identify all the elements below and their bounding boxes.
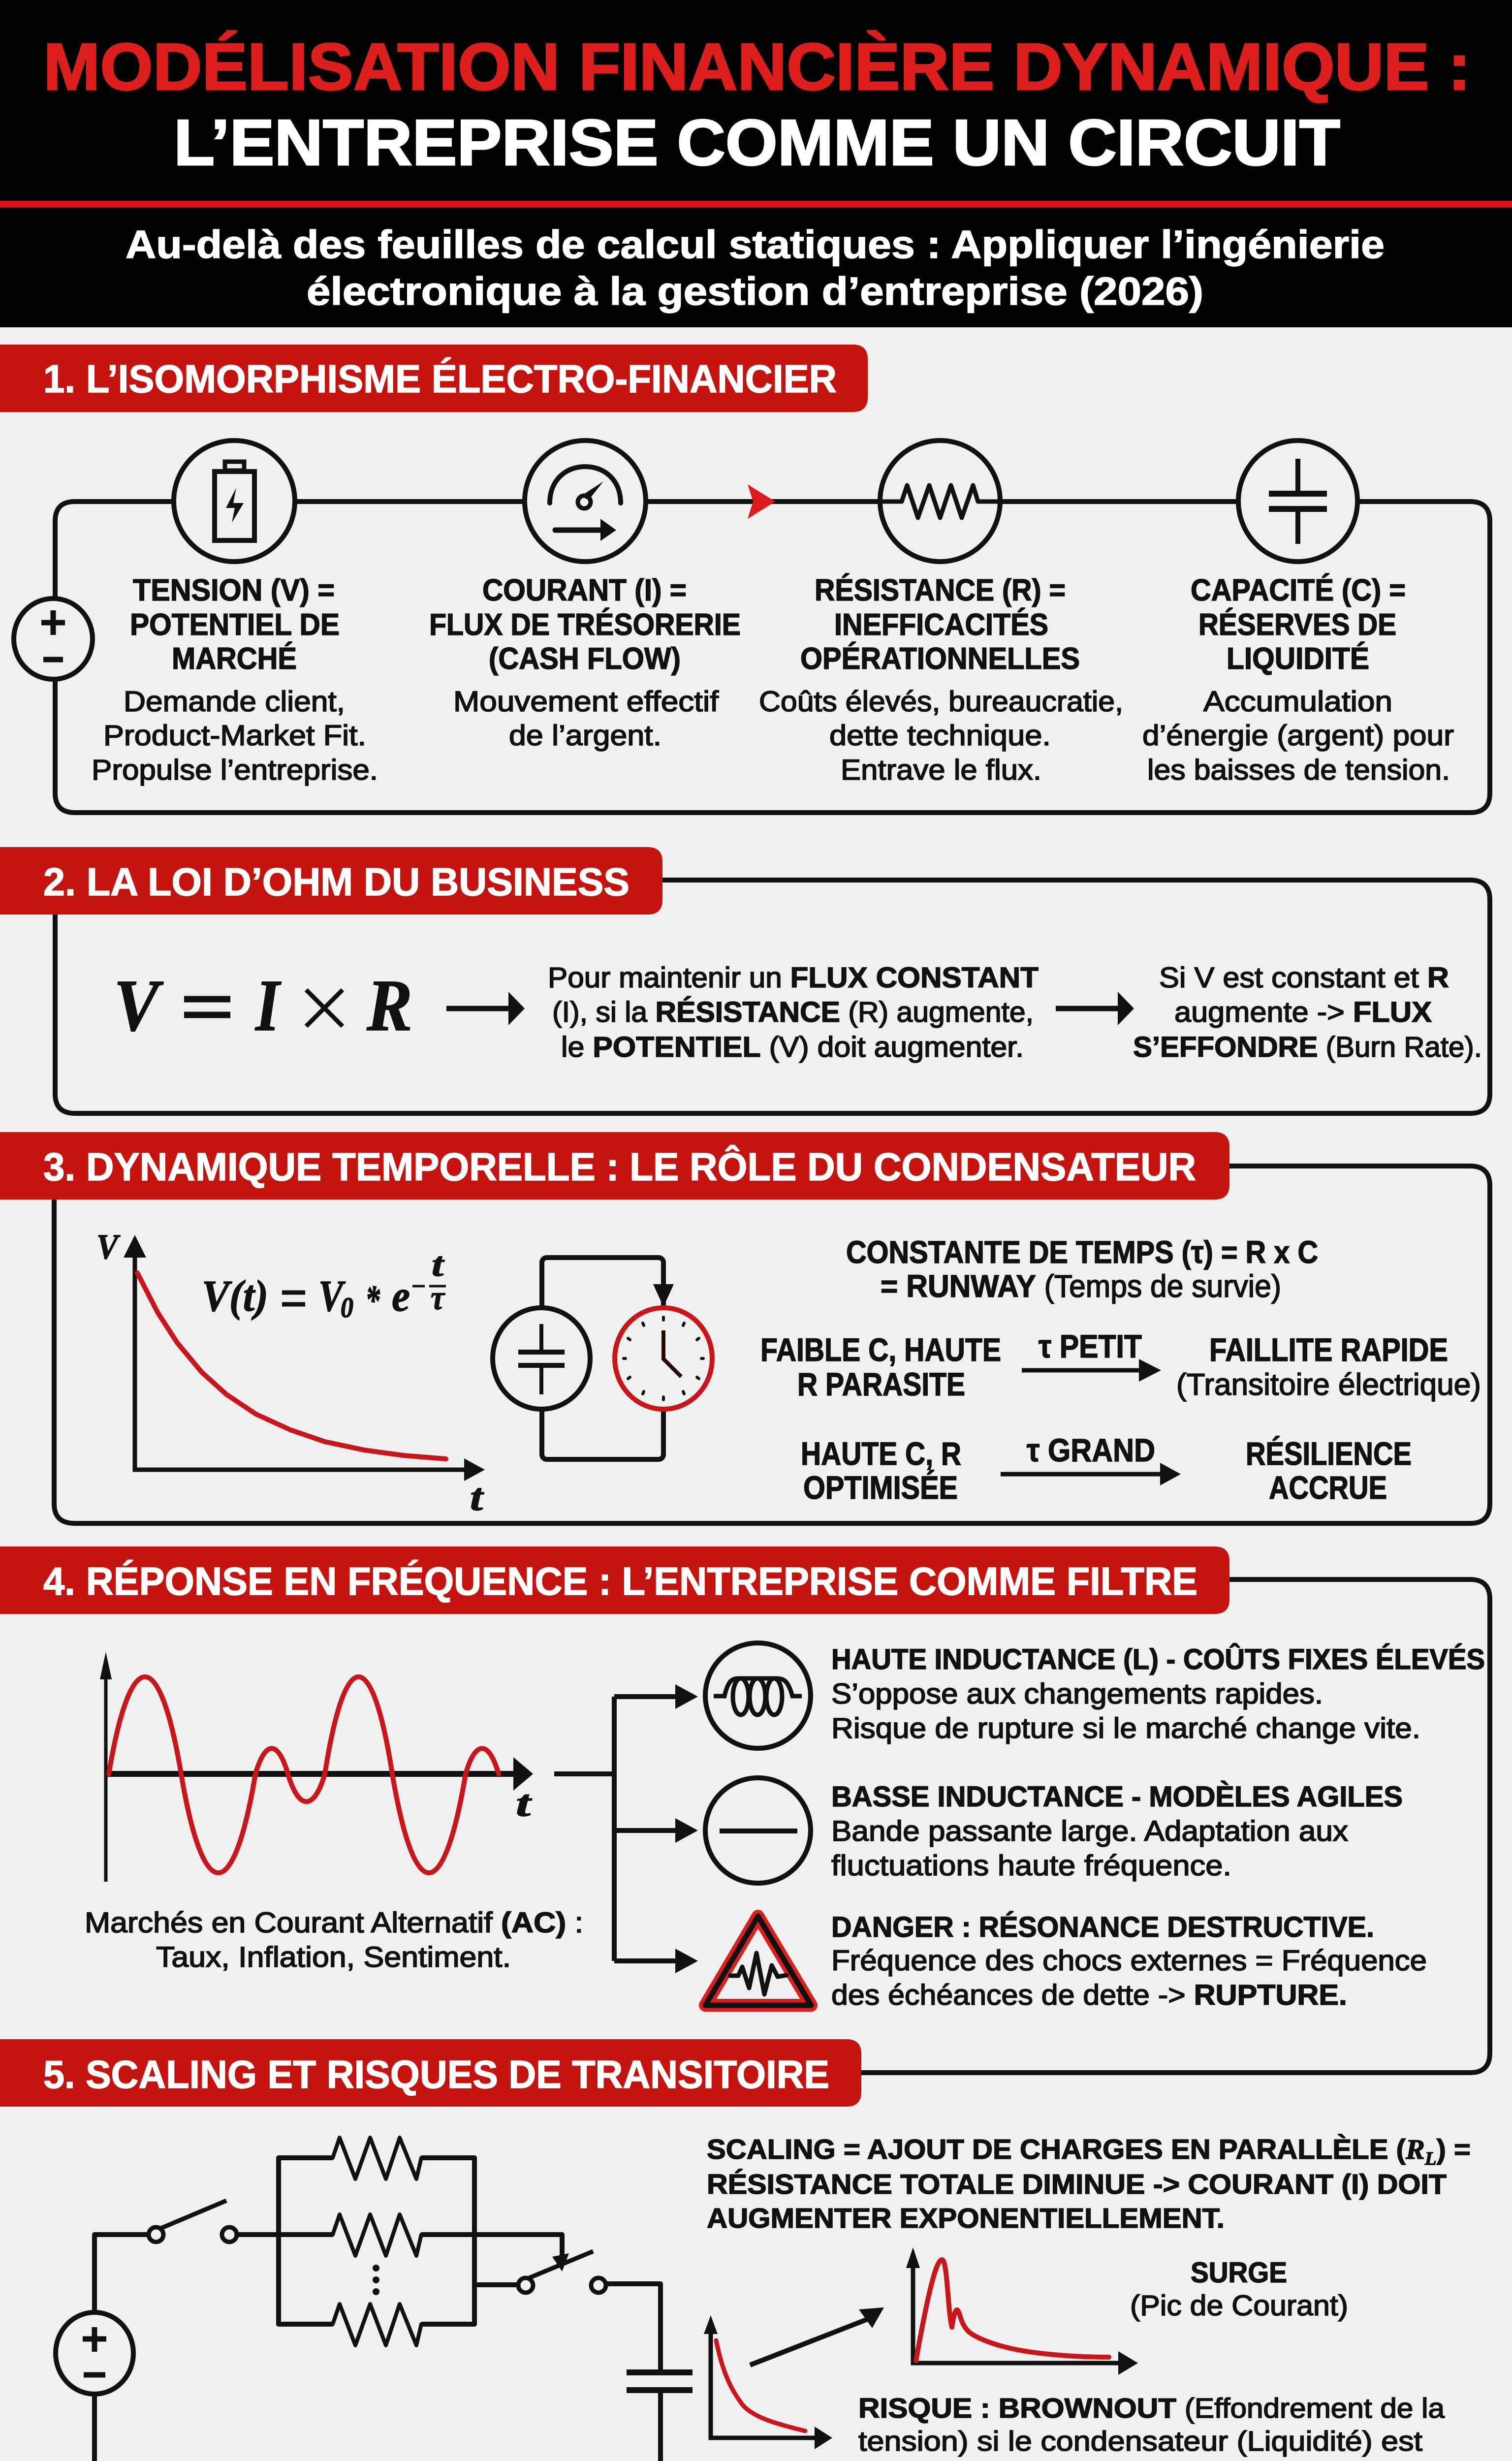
text block: resistance: Entrave le flux. <box>841 754 1041 786</box>
heading tag 1 <box>0 345 868 412</box>
text block: haute inductance: S’oppose aux changements rapides. <box>831 1678 1323 1710</box>
label: surge: SURGE <box>1191 2257 1287 2289</box>
chart: brownout decay <box>704 2315 832 2449</box>
heading tag 2 <box>0 847 662 915</box>
text block: haute inductance: HAUTE INDUCTANCE (L) - COÛTS FIXES ÉLEVÉS <box>831 1643 1485 1675</box>
panel frame 4 <box>861 1579 1490 2073</box>
row: resilience accrue: ACCRUE <box>1269 1469 1387 1506</box>
text block: risque brownout: RISQUE : BROWNOUT (Effondrement de la <box>858 2393 1445 2424</box>
text block: capacite <box>1142 573 1454 786</box>
text block: danger resonance: DANGER : RÉSONANCE DESTRUCTIVE. <box>831 1911 1374 1943</box>
formula V = I x R: V <box>114 965 164 1046</box>
title: MODÉLISATION FINANCIÈRE DYNAMIQUE : <box>43 30 1471 104</box>
title: L’ENTREPRISE COMME UN CIRCUIT <box>174 106 1340 179</box>
text block: scaling: = <box>1454 2134 1470 2165</box>
heading tag 1: 1. L’ISOMORPHISME ÉLECTRO-FINANCIER <box>43 357 837 401</box>
text block: danger resonance: des échéances de dette -> RUPTURE. <box>831 1979 1347 2011</box>
diagram: parallel load circuit <box>56 2138 693 2461</box>
text block: resistance <box>759 573 1123 786</box>
formula V = I x R: I <box>254 965 282 1046</box>
text block: courant: (CASH FLOW) <box>489 642 681 676</box>
label: surge: (Pic de Courant) <box>1130 2290 1348 2322</box>
header band <box>0 0 1512 327</box>
text block: flux s'effondre: S’EFFONDRE (Burn Rate). <box>1133 1031 1482 1063</box>
text block: courant: de l’argent. <box>509 720 662 752</box>
arrow: red current direction <box>748 484 775 519</box>
panel: section 1 isomorphisme <box>0 345 1490 813</box>
text block: danger resonance <box>831 1911 1427 2011</box>
switch 1 <box>149 2201 237 2242</box>
text block: basse inductance: Bande passante large. Adaptation aux <box>831 1815 1348 1847</box>
text block: courant: COURANT (I) = <box>482 573 687 607</box>
arrow tree: three branches <box>554 1684 698 1973</box>
text block: flux s'effondre <box>1133 962 1482 1063</box>
subtitle <box>126 222 1385 313</box>
caption: AC markets: Taux, Inflation, Sentiment. <box>156 1941 511 1973</box>
text block: scaling: AUGMENTER EXPONENTIELLEMENT. <box>707 2203 1225 2234</box>
text block: danger resonance: Fréquence des chocs externes = Fréquence <box>831 1945 1427 1977</box>
icon: resistor <box>880 441 1000 562</box>
icon: low inductance line <box>705 1778 811 1883</box>
formula V = I x R <box>114 965 412 1046</box>
icon: battery <box>174 441 295 562</box>
subtitle: Au-delà des feuilles de calcul statiques : Appliquer l’ingénierie <box>126 222 1385 266</box>
row: faillite rapide: FAILLITE RAPIDE <box>1209 1331 1448 1368</box>
caption: AC markets: Marchés en Courant Alternatif (AC) : <box>85 1907 583 1939</box>
text block: tension: POTENTIEL DE <box>130 608 340 642</box>
text block: courant: Mouvement effectif <box>453 686 719 718</box>
panel: section 4 reponse en frequence <box>0 1546 1490 2073</box>
heading tag 4: 4. RÉPONSE EN FRÉQUENCE : L’ENTREPRISE COMME FILTRE <box>43 1559 1197 1603</box>
text block: flux constant <box>548 962 1039 1063</box>
arrow to conclusion <box>1056 992 1134 1025</box>
switch 2 <box>474 2251 606 2293</box>
icon: clock <box>615 1308 712 1409</box>
resistors in parallel <box>333 2138 421 2345</box>
panel: section 3 dynamique temporelle <box>0 1132 1490 1523</box>
text block: courant: FLUX DE TRÉSORERIE <box>429 608 741 642</box>
panel: section 2 loi d'ohm <box>0 847 1490 1113</box>
icon: inductor <box>705 1643 811 1748</box>
text block: resistance: INEFFICACITÉS <box>834 608 1048 642</box>
text block: scaling: RÉSISTANCE TOTALE DIMINUE -> COURANT (I) DOIT <box>707 2169 1447 2200</box>
panel frame 2 <box>55 880 1490 1113</box>
formula V(t): 0 <box>341 1292 353 1324</box>
row: faillite rapide: FAIBLE C, HAUTE <box>760 1331 1001 1368</box>
heading tag 2: 2. LA LOI D’OHM DU BUSINESS <box>43 860 630 904</box>
row: resilience accrue: τ GRAND <box>1027 1432 1155 1468</box>
text block: tension: Propulse l’entreprise. <box>92 754 378 786</box>
text block: scaling: L <box>1424 2148 1437 2169</box>
formula V = I x R: R <box>366 965 412 1046</box>
text block: basse inductance: BASSE INDUCTANCE - MODÈLES AGILES <box>831 1781 1403 1813</box>
text block: capacite: les baisses de tension. <box>1147 754 1450 786</box>
row: faillite rapide <box>760 1328 1481 1402</box>
panel frame 3 <box>54 1166 1490 1523</box>
icon: capacitor <box>493 1308 590 1409</box>
text block: risque brownout <box>858 2393 1445 2461</box>
chart: voltage decay: V <box>96 1227 121 1266</box>
diagram: RC loop with capacitor and clock <box>493 1258 712 1459</box>
text block: capacite: LIQUIDITÉ <box>1227 642 1369 676</box>
text block: flux constant: (I), si la RÉSISTANCE (R) augmente, <box>552 996 1034 1028</box>
text block: capacite: d’énergie (argent) pour <box>1142 720 1454 752</box>
text block: resistance: OPÉRATIONNELLES <box>800 642 1080 676</box>
title <box>43 30 1471 179</box>
icon: danger triangle <box>705 1916 811 2005</box>
row: resilience accrue: RÉSILIENCE <box>1246 1435 1412 1472</box>
caption: AC markets <box>85 1907 583 1973</box>
formula V(t): t <box>432 1246 445 1284</box>
icon: gauge and arrow <box>525 441 646 562</box>
subtitle: électronique à la gestion d’entreprise (2026) <box>307 269 1203 313</box>
text block: tension: Product-Market Fit. <box>103 720 366 752</box>
heading tag 5: 5. SCALING ET RISQUES DE TRANSITOIRE <box>43 2052 829 2096</box>
text block: constante de temps: = RUNWAY (Temps de survie) <box>881 1268 1281 1304</box>
row: faillite rapide: τ PETIT <box>1039 1328 1142 1364</box>
arrow: diagonal to surge <box>750 2307 884 2365</box>
formula V(t): * <box>365 1276 380 1324</box>
text block: capacite: CAPACITÉ (C) = <box>1191 573 1406 607</box>
circuit frame 1 <box>55 502 1490 813</box>
text block: basse inductance: fluctuations haute fréquence. <box>831 1850 1231 1882</box>
text block: resistance: dette technique. <box>829 720 1051 752</box>
row: resilience accrue: OPTIMISÉE <box>803 1469 958 1506</box>
text block: tension: MARCHÉ <box>172 642 297 676</box>
text block: tension: Demande client, <box>124 686 345 718</box>
text block: flux constant: le POTENTIEL (V) doit augmenter. <box>561 1031 1024 1063</box>
text block: haute inductance <box>831 1643 1485 1744</box>
text block: capacite: RÉSERVES DE <box>1198 608 1396 642</box>
text block: scaling: ) <box>1437 2134 1446 2165</box>
text block: flux constant: Pour maintenir un FLUX CONSTANT <box>548 962 1039 994</box>
text block: capacite: Accumulation <box>1203 686 1392 718</box>
text block: constante de temps <box>846 1234 1318 1304</box>
heading tag 5 <box>0 2039 861 2107</box>
chart: AC wave: t <box>516 1783 533 1824</box>
icon: source plus minus <box>56 2312 133 2394</box>
formula V(t): τ <box>431 1279 445 1317</box>
text block: risque brownout: tension) si le condensateur (Liquidité) est <box>858 2426 1422 2457</box>
formula V(t) <box>202 1246 446 1324</box>
text block: resistance: RÉSISTANCE (R) = <box>815 573 1066 607</box>
icon: capacitor <box>1238 441 1357 562</box>
row: resilience accrue: HAUTE C, R <box>801 1435 961 1472</box>
chart: AC wave <box>100 1652 533 1882</box>
text block: haute inductance: Risque de rupture si le marché change vite. <box>831 1712 1420 1744</box>
text block: tension: TENSION (V) = <box>133 573 335 607</box>
chart: surge peak <box>906 2247 1138 2375</box>
row: faillite rapide: (Transitoire électrique) <box>1176 1368 1481 1402</box>
chart: voltage decay <box>96 1227 485 1518</box>
heading tag 3: 3. DYNAMIQUE TEMPORELLE : LE RÔLE DU CONDENSATEUR <box>43 1145 1196 1189</box>
formula V(t): e <box>392 1272 410 1321</box>
row: faillite rapide: R PARASITE <box>797 1366 965 1402</box>
heading tag 4 <box>0 1546 1229 1614</box>
row: resilience accrue <box>801 1432 1412 1506</box>
text block: flux s'effondre: Si V est constant et R <box>1159 962 1449 994</box>
formula V(t): V(t) <box>202 1272 268 1321</box>
heading tag 3 <box>0 1132 1229 1199</box>
text block: resistance: Coûts élevés, bureaucratie, <box>759 686 1123 718</box>
text block: scaling: SCALING = AJOUT DE CHARGES EN PARALLÈLE ( R <box>707 2134 1424 2165</box>
formula V(t): V <box>318 1272 346 1321</box>
panel: section 5 scaling <box>0 2039 1471 2461</box>
icon: source plus minus <box>14 599 93 679</box>
arrow to explanation <box>446 992 525 1025</box>
text block: constante de temps: CONSTANTE DE TEMPS (τ) = R x C <box>846 1234 1318 1270</box>
text block: basse inductance <box>831 1781 1403 1882</box>
text block: scaling <box>707 2134 1471 2234</box>
text block: tension <box>92 573 378 786</box>
chart: voltage decay: t <box>470 1476 484 1518</box>
label: surge <box>1130 2257 1348 2322</box>
text block: courant <box>429 573 741 752</box>
text block: flux s'effondre: augmente -> FLUX <box>1174 996 1432 1028</box>
